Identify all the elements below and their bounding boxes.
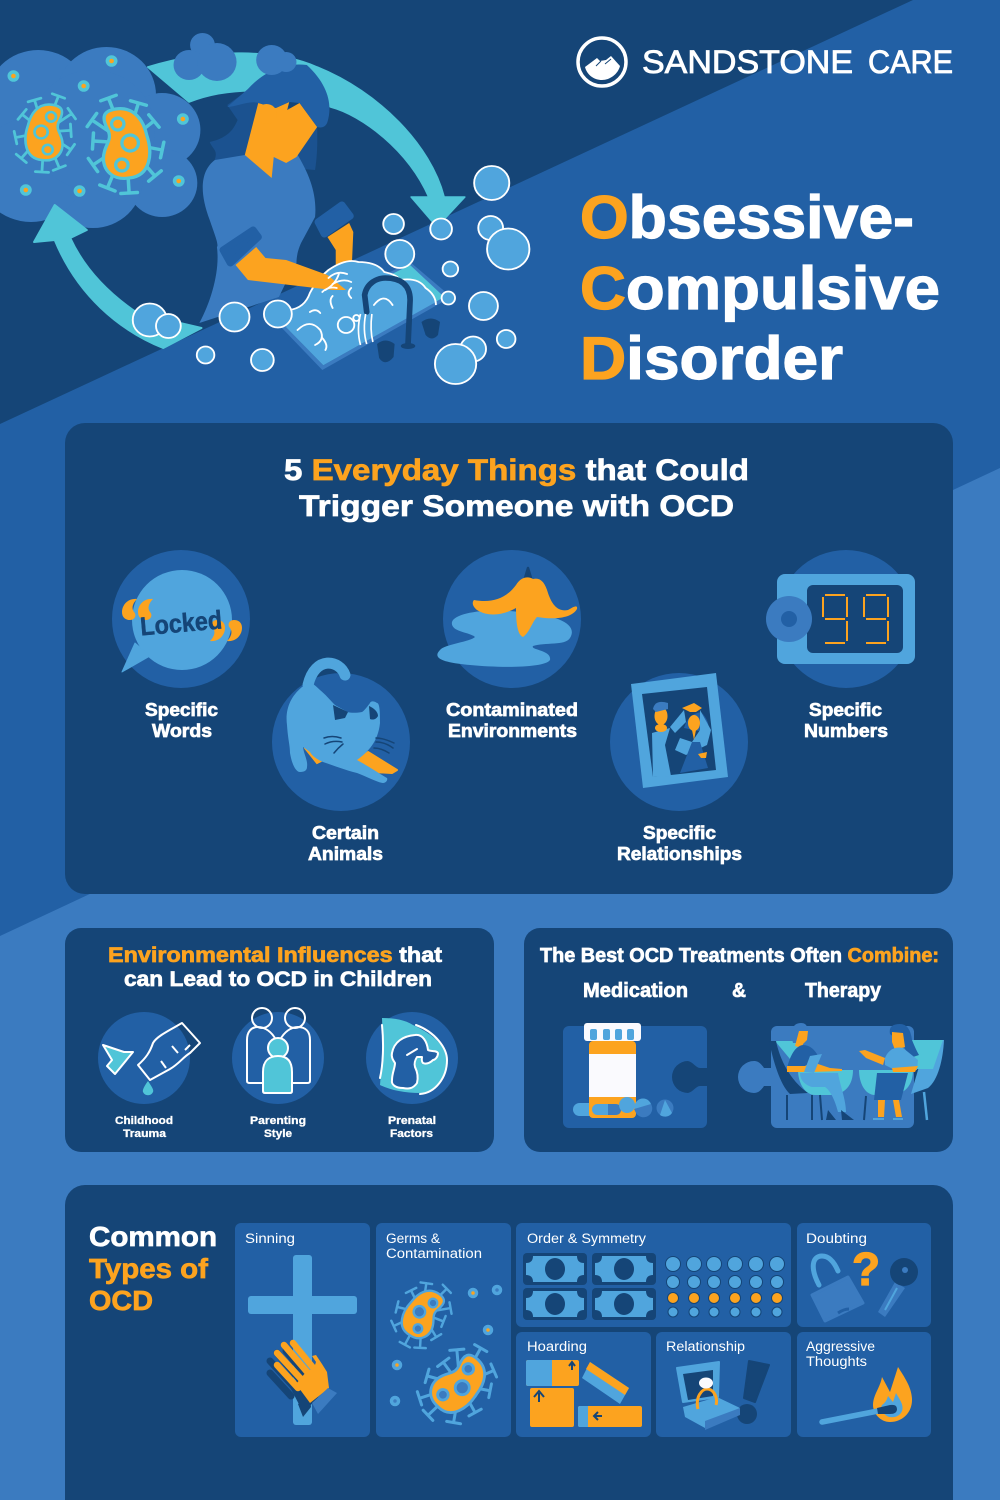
label: parenting style [250,1115,306,1140]
label: certain animals [308,823,383,864]
label: certain animals: Animals [308,844,383,864]
label: contaminated environments: Contaminated [446,700,578,720]
icon: germs [383,1271,513,1438]
tile label [386,1231,482,1261]
label: specific numbers [804,700,888,741]
label: specific numbers: Specific [809,700,882,720]
tile label [806,1339,875,1369]
icon: medication puzzle piece [563,1023,707,1128]
title: Disorder [580,325,843,392]
title [580,184,940,392]
label: specific words: Words [152,721,212,741]
title: Obsessive- [580,184,914,251]
tile: germs and contamination [376,1223,513,1438]
panel heading: 5 Everyday Things that Could [284,454,749,487]
label: certain animals: Certain [312,823,379,843]
icon: faucet [358,278,440,362]
label: specific relationships: Specific [643,823,716,843]
icon: four bills [523,1253,656,1320]
panel heading: Trigger Someone with OCD [299,490,734,523]
tile: sinning [235,1223,370,1437]
label: prenatal factors: Prenatal [388,1115,436,1127]
soap bubbles [133,166,529,384]
icon: specific words speech bubble [112,550,250,688]
treatment labels: Therapy [805,980,882,1002]
icon: therapy puzzle piece with two people [738,1023,944,1128]
icon: digital counter showing 99 [766,550,915,688]
tile: hoarding [516,1332,651,1437]
label: specific numbers: Numbers [804,721,888,741]
tile: aggressive thoughts [797,1332,931,1437]
icon: burning match [822,1367,912,1422]
logo [578,38,953,86]
tile label: Aggressive [806,1339,875,1354]
icon: open lock, question mark, key: ? [852,1243,880,1295]
panel: environmental influences [65,928,494,1152]
tile: order and symmetry: Order & Symmetry [527,1231,646,1246]
tile: hoarding: Hoarding [527,1339,587,1354]
tile: order and symmetry [516,1223,791,1327]
icon: framed couple photo [610,673,748,811]
tile: doubting: Doubting [806,1231,867,1246]
panel: 5 everyday things [65,423,953,894]
label: specific words: Specific [145,700,218,720]
label: prenatal factors: Factors [390,1128,433,1140]
icon: specific words speech bubble: Locked [139,604,223,642]
label: parenting style: Style [264,1128,292,1140]
right chair and client [859,1024,944,1120]
panel: common types of OCD [65,1185,953,1500]
logo wordmark: CARE [868,44,953,80]
title: Compulsive [580,255,940,322]
logo mark [578,38,626,86]
icon: banana peel on puddle [437,550,581,688]
label: specific words [145,700,218,741]
panel heading: The Best OCD Treatments Often Combine: [540,945,939,967]
logo wordmark: SANDSTONE [642,44,853,80]
tile: sinning: Sinning [245,1231,295,1246]
panel heading: Common [89,1221,217,1252]
panel heading [284,454,749,523]
arrow: upper cycle arc [148,53,465,227]
tile label: Germs & [386,1231,440,1246]
panel: OCD treatments [524,928,953,1152]
logo wordmark [642,44,953,80]
panel heading [108,944,442,991]
label: specific relationships [617,823,742,864]
label: specific relationships: Relationships [617,844,742,864]
thought cloud with germs [0,33,237,228]
panel heading: OCD [89,1285,153,1316]
arrow: lower cycle arc [34,205,201,348]
sink [236,247,451,370]
person [199,45,353,323]
icon: ring box and exclamation [677,1361,769,1430]
icon: cross and praying hands [248,1255,357,1425]
panel heading: Environmental Influences that [108,944,442,967]
tile: relationship: Relationship [666,1339,745,1354]
icon: cat [272,663,410,811]
icon: parents and child [232,1008,324,1104]
icon: dot rows [666,1256,784,1317]
treatment labels: & [732,980,746,1002]
label: contaminated environments: Environments [448,721,577,741]
label: parenting style: Parenting [250,1115,306,1127]
panel heading: Types of [89,1253,209,1284]
label: childhood trauma: Childhood [115,1115,173,1127]
left chair and therapist [769,1023,854,1120]
illustration: person washing hands with obsessive cycle [0,33,529,384]
tile label: Thoughts [806,1354,867,1369]
icon: stacked boxes [526,1360,642,1427]
tile: doubting [797,1223,931,1327]
panel heading: can Lead to OCD in Children [124,968,432,991]
icon: baby bottle [98,1012,200,1104]
treatment labels: Medication [583,980,688,1002]
label: contaminated environments [446,700,578,741]
label: childhood trauma: Trauma [123,1128,167,1140]
treatment labels [583,980,882,1002]
tile: relationship [656,1332,791,1437]
tile label: Contamination [386,1246,482,1261]
label: prenatal factors [388,1115,436,1140]
panel heading [89,1221,217,1316]
label: childhood trauma [115,1115,173,1140]
icon: fetus in womb [366,1012,458,1104]
